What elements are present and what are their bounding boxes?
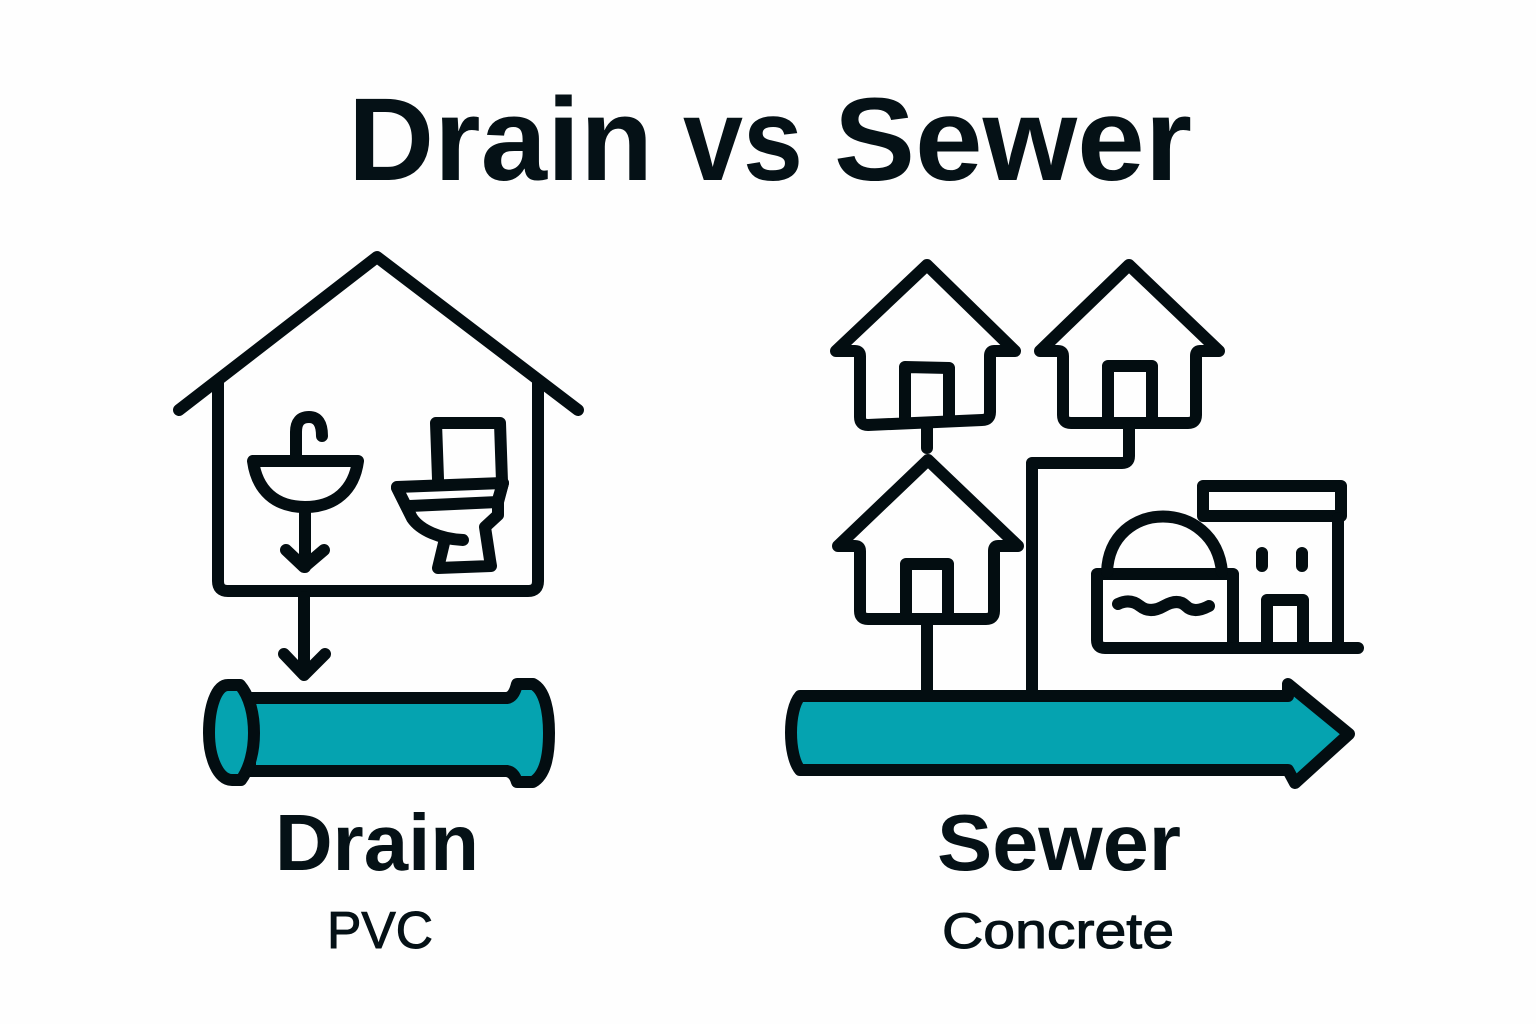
icon: house top right	[1040, 265, 1219, 423]
icon: treatment plant	[1097, 486, 1358, 648]
title: vs	[683, 74, 803, 206]
sewer material: Concrete	[942, 903, 1174, 959]
title: Sewer	[834, 74, 1192, 206]
title	[348, 74, 1192, 206]
icon: sink	[253, 417, 358, 567]
icon: sewer pipe arrow	[791, 684, 1349, 783]
icon: house top left	[836, 265, 1015, 425]
icon: house lower left	[838, 460, 1018, 619]
panel: drain	[179, 257, 578, 782]
drain material: PVC	[327, 902, 433, 960]
panel: sewer	[791, 265, 1358, 783]
title: Drain	[348, 74, 653, 206]
icon: toilet	[397, 423, 503, 568]
drain label: Drain	[275, 798, 479, 887]
icon: drain pipe	[209, 684, 549, 782]
icon: house outline	[179, 257, 578, 591]
sewer label: Sewer	[937, 798, 1181, 887]
connectors	[927, 426, 1129, 690]
arrow: drain to pipe	[284, 597, 325, 675]
